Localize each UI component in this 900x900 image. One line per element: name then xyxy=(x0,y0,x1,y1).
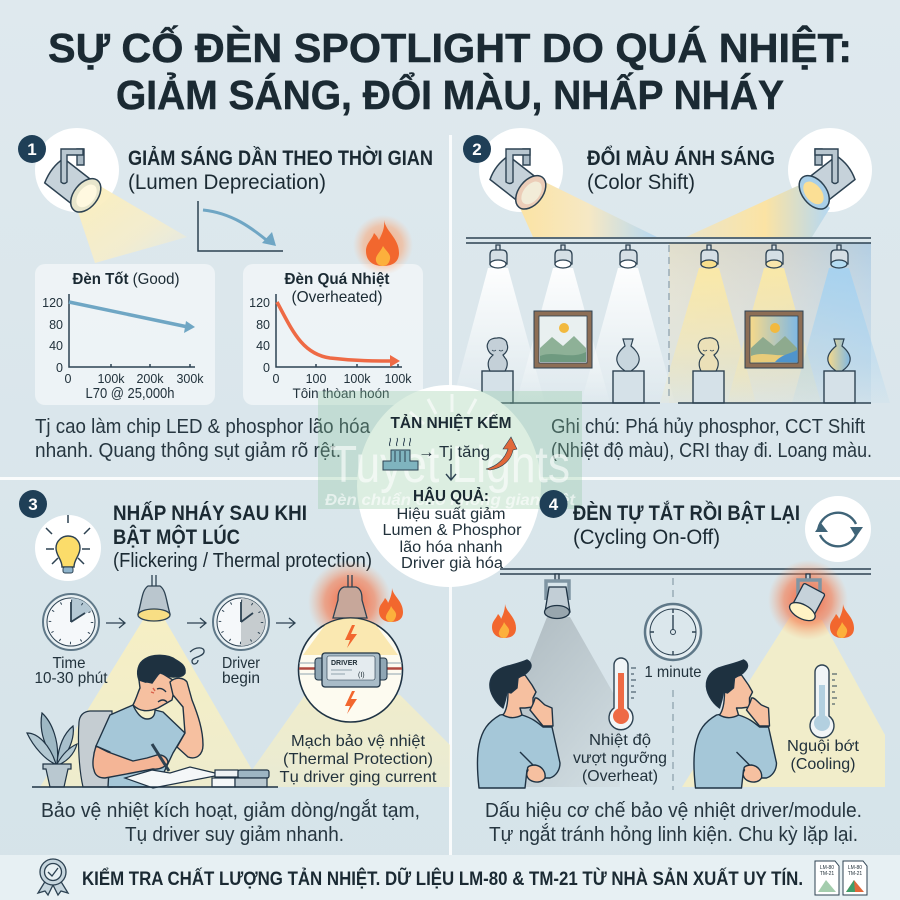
consequences text: HẬU QUẢ: xyxy=(413,486,489,505)
icon: flame xyxy=(830,604,854,638)
clock xyxy=(645,604,701,660)
watermark xyxy=(318,391,582,509)
callout heading: TẢN NHIỆT KẾM xyxy=(390,413,512,432)
icon: right spotlight xyxy=(686,128,872,237)
vases xyxy=(617,339,850,371)
warm beam xyxy=(682,617,885,787)
heading 4 xyxy=(573,501,800,549)
card: overheated lamp chart: 100k xyxy=(343,372,371,386)
icon: overheat thermometer xyxy=(609,658,636,730)
icon: rising arrow xyxy=(486,437,517,470)
icon: quality badge xyxy=(38,859,68,895)
title xyxy=(48,25,852,118)
painting right xyxy=(745,311,803,368)
card: overheated lamp chart xyxy=(243,215,423,405)
driver circuit callout xyxy=(298,618,402,722)
heading 3 xyxy=(113,502,372,572)
text: thermal protection label: Tụ driver ging current xyxy=(280,769,437,786)
icon: bulb xyxy=(35,515,101,581)
heading 3: BẬT MỘT LÚC xyxy=(113,525,240,549)
card: good lamp chart: 120 xyxy=(42,296,63,310)
icon: down arrow xyxy=(446,464,456,480)
card: overheated lamp chart: (Overheated) xyxy=(292,289,382,306)
consequences text: Hiệu suất giảm xyxy=(396,506,506,523)
panel: color shift xyxy=(452,128,890,462)
text: thermal protection label: (Thermal Protection) xyxy=(283,751,433,768)
label: overheat: (Overheat) xyxy=(582,768,658,785)
icon: lamp xyxy=(138,575,170,621)
plant xyxy=(27,713,77,787)
text: Tj rising: → Tj tăng xyxy=(418,444,490,461)
card: overheated lamp chart: Đèn Quá Nhiệt xyxy=(284,271,390,288)
icon: LM-80 document xyxy=(815,861,839,895)
panel: cycling xyxy=(478,490,885,846)
card: overheated lamp chart: 80 xyxy=(256,318,270,332)
badge 2 xyxy=(463,135,491,163)
consequences text: Driver già hóa xyxy=(401,555,503,572)
card: overheated lamp chart: 0 xyxy=(273,372,280,386)
badge 1: 1 xyxy=(27,140,37,159)
card: overheated lamp chart: 100k xyxy=(384,372,412,386)
badge 4 xyxy=(540,490,568,518)
center callout xyxy=(318,385,582,587)
heading 2 xyxy=(587,146,775,194)
text: color shift note xyxy=(551,415,872,462)
labels: clocks: Time xyxy=(52,655,86,672)
heading 1 xyxy=(128,146,433,194)
driver circuit callout: (I) xyxy=(358,672,365,679)
text: thermal protection label: Mạch bảo vệ nhiệt xyxy=(291,733,426,750)
panel: flickering xyxy=(19,490,450,846)
book and stacked books xyxy=(125,767,269,788)
icon: LM-80 document: TM-21 xyxy=(820,871,834,877)
card: overheated lamp chart: 0 xyxy=(263,361,270,375)
track xyxy=(500,569,871,574)
watermark: Tuyet Lights xyxy=(330,436,570,494)
labels: clocks xyxy=(34,655,261,687)
heading 1: GIẢM SÁNG DẦN THEO THỜI GIAN xyxy=(128,146,433,170)
label: cooling xyxy=(787,738,860,773)
text: color shift note: Ghi chú: Phá hủy phosphor, CCT Shift xyxy=(551,415,865,438)
overheated lamp xyxy=(308,560,392,644)
chair xyxy=(78,711,112,787)
labels: clocks: Driver xyxy=(222,655,261,672)
card: good lamp chart: 100k xyxy=(97,372,125,386)
card: good lamp chart xyxy=(35,264,215,405)
card: overheated lamp chart: 120 xyxy=(249,296,270,310)
person: thinking, right xyxy=(694,660,776,788)
badge 4: 4 xyxy=(549,495,559,514)
person: stressed at desk xyxy=(93,655,203,787)
panel: lumen depreciation xyxy=(18,128,433,462)
card: overheated lamp chart: Tôin thòan hoón xyxy=(292,385,390,401)
icon: TM-21 document xyxy=(843,861,867,895)
icon: spotlight with beam xyxy=(35,128,187,263)
label: overheat xyxy=(573,732,667,785)
light beams xyxy=(40,620,450,787)
icon: LM-80 document: LM-80 xyxy=(820,865,834,871)
desk line xyxy=(32,786,278,788)
badge 3 xyxy=(19,490,47,518)
consequences text xyxy=(382,486,522,572)
card: overheated lamp chart: 100 xyxy=(306,372,326,386)
text: thermal protection label xyxy=(280,733,437,786)
label: overheat: Nhiệt độ xyxy=(589,732,651,749)
title: SỰ CỐ ĐÈN SPOTLIGHT DO QUÁ NHIỆT: xyxy=(48,25,852,71)
consequences text: Lumen & Phosphor xyxy=(382,522,522,539)
text: lumen note: nhanh. Quang thông sụt giảm rõ rệt. xyxy=(35,439,341,462)
badge 3: 3 xyxy=(28,495,38,514)
card: good lamp chart: 80 xyxy=(49,318,63,332)
heading 4: ĐÈN TỰ TẮT RỒI BẬT LẠI xyxy=(573,501,800,525)
card: good lamp chart: 200k xyxy=(136,372,164,386)
painting left xyxy=(534,311,592,368)
watermark: Đèn chuẩn cho không gian Việt xyxy=(325,491,576,509)
icon: left spotlight xyxy=(479,128,657,237)
footer text: KIỂM TRA CHẤT LƯỢNG TẢN NHIỆT. DỮ LIỆU LM-80 & TM-21 TỪ NHÀ SẢN XUẤT UY TÍN. xyxy=(82,866,803,890)
badge 2: 2 xyxy=(472,140,482,159)
dim beam xyxy=(480,617,620,787)
icon: dizzy swirl xyxy=(190,648,204,664)
text: cycling note xyxy=(485,799,862,846)
badge 1 xyxy=(18,135,46,163)
text: cycling note: Dấu hiệu cơ chế bảo vệ nhiệt driver/module. xyxy=(485,799,862,822)
text: lumen note: Tj cao làm chip LED & phosphor lão hóa xyxy=(35,415,371,438)
busts xyxy=(487,338,719,371)
card: good lamp chart: 0 xyxy=(65,372,72,386)
right spotlight with glow xyxy=(768,560,848,640)
divider dashes xyxy=(672,578,674,790)
labels: clocks: 10-30 phút xyxy=(34,670,108,687)
clock 2 xyxy=(213,594,269,650)
heading 2: ĐỔI MÀU ÁNH SÁNG xyxy=(587,146,775,170)
icon: flame xyxy=(492,604,516,638)
icon: cycle arrows xyxy=(805,496,871,562)
text: cycling note: Tự ngắt tránh hỏng linh kiện. Chu kỳ lặp lại. xyxy=(489,823,858,846)
heading 3: NHẤP NHÁY SAU KHI xyxy=(113,502,307,525)
clock 1 xyxy=(43,594,99,650)
label: cooling: (Cooling) xyxy=(790,756,856,773)
person: thinking, left xyxy=(478,660,560,788)
card: good lamp chart: Đèn Tốt (Good) xyxy=(72,271,180,288)
labels: clocks: begin xyxy=(222,670,260,687)
label: 1 minute: 1 minute xyxy=(644,664,702,681)
heading 2: (Color Shift) xyxy=(587,171,695,194)
text: flicker note xyxy=(41,799,420,846)
arrow xyxy=(187,618,206,628)
icon: cooling thermometer xyxy=(810,665,837,738)
heading 4: (Cycling On-Off) xyxy=(573,526,720,549)
arrow xyxy=(106,618,125,628)
off spotlight xyxy=(544,574,570,618)
text: flicker note: Tụ driver suy giảm nhanh. xyxy=(125,823,344,846)
track lights xyxy=(490,245,848,268)
arrow xyxy=(276,618,295,628)
consequences text: lão hóa nhanh xyxy=(400,539,502,556)
card: good lamp chart: 300k xyxy=(176,372,204,386)
icon: TM-21 document: TM-21 xyxy=(848,871,862,877)
footer band xyxy=(0,855,900,900)
card: good lamp chart: L70 @ 25,000h xyxy=(86,385,174,402)
label: cooling: Nguội bớt xyxy=(787,738,860,755)
icon: flame xyxy=(353,215,413,275)
driver circuit callout: DRIVER xyxy=(331,660,357,667)
icon: flame xyxy=(379,588,403,622)
title: GIẢM SÁNG, ĐỔI MÀU, NHẤP NHÁY xyxy=(116,71,784,118)
gallery illustration xyxy=(452,238,890,403)
icon: mini decline chart xyxy=(198,201,283,251)
card: good lamp chart: 0 xyxy=(56,361,63,375)
heading 3: (Flickering / Thermal protection) xyxy=(113,550,372,572)
text: flicker note: Bảo vệ nhiệt kích hoạt, giảm dòng/ngắt tạm, xyxy=(41,799,420,822)
heading 1: (Lumen Depreciation) xyxy=(128,171,326,194)
pedestals and floor xyxy=(482,371,871,403)
card: good lamp chart: 40 xyxy=(49,339,63,353)
label: overheat: vượt ngưỡng xyxy=(573,750,667,767)
text: lumen note xyxy=(35,415,371,462)
card: overheated lamp chart: 40 xyxy=(256,339,270,353)
icon: TM-21 document: LM-80 xyxy=(848,865,862,871)
icon: heat sink xyxy=(383,438,418,470)
